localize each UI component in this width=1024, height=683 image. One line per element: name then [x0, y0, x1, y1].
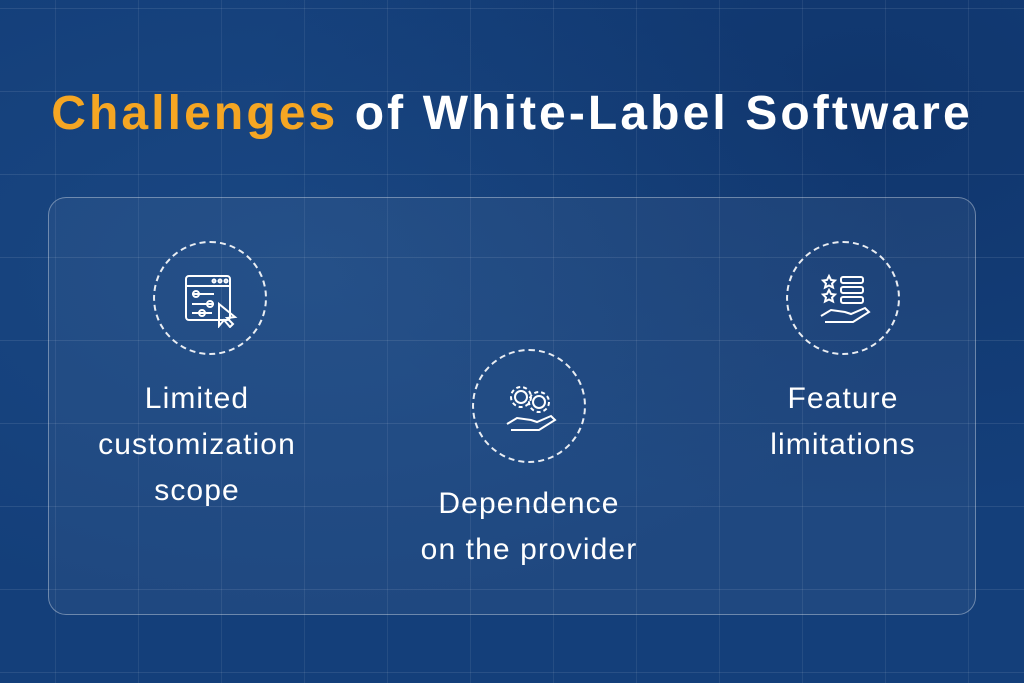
- text: limited customization scope: customization: [98, 428, 296, 461]
- text: dependence on the provider: [421, 487, 637, 566]
- panel: challenges: [48, 197, 976, 615]
- text: feature limitations: Feature: [787, 382, 899, 415]
- text: limited customization scope: Limited: [145, 382, 249, 415]
- text: limited customization scope: [98, 382, 296, 507]
- text: dependence on the provider: on the provider: [421, 533, 637, 566]
- text: feature limitations: [770, 382, 916, 461]
- icon: feature list stars: [786, 241, 900, 355]
- text: feature limitations: limitations: [770, 428, 916, 461]
- icon: gears on hand: [472, 349, 586, 463]
- text: dependence on the provider: Dependence: [438, 487, 620, 520]
- text: limited customization scope: scope: [154, 474, 240, 507]
- icon: customization settings: [153, 241, 267, 355]
- title: Challenges of White-Label Software: [51, 87, 973, 140]
